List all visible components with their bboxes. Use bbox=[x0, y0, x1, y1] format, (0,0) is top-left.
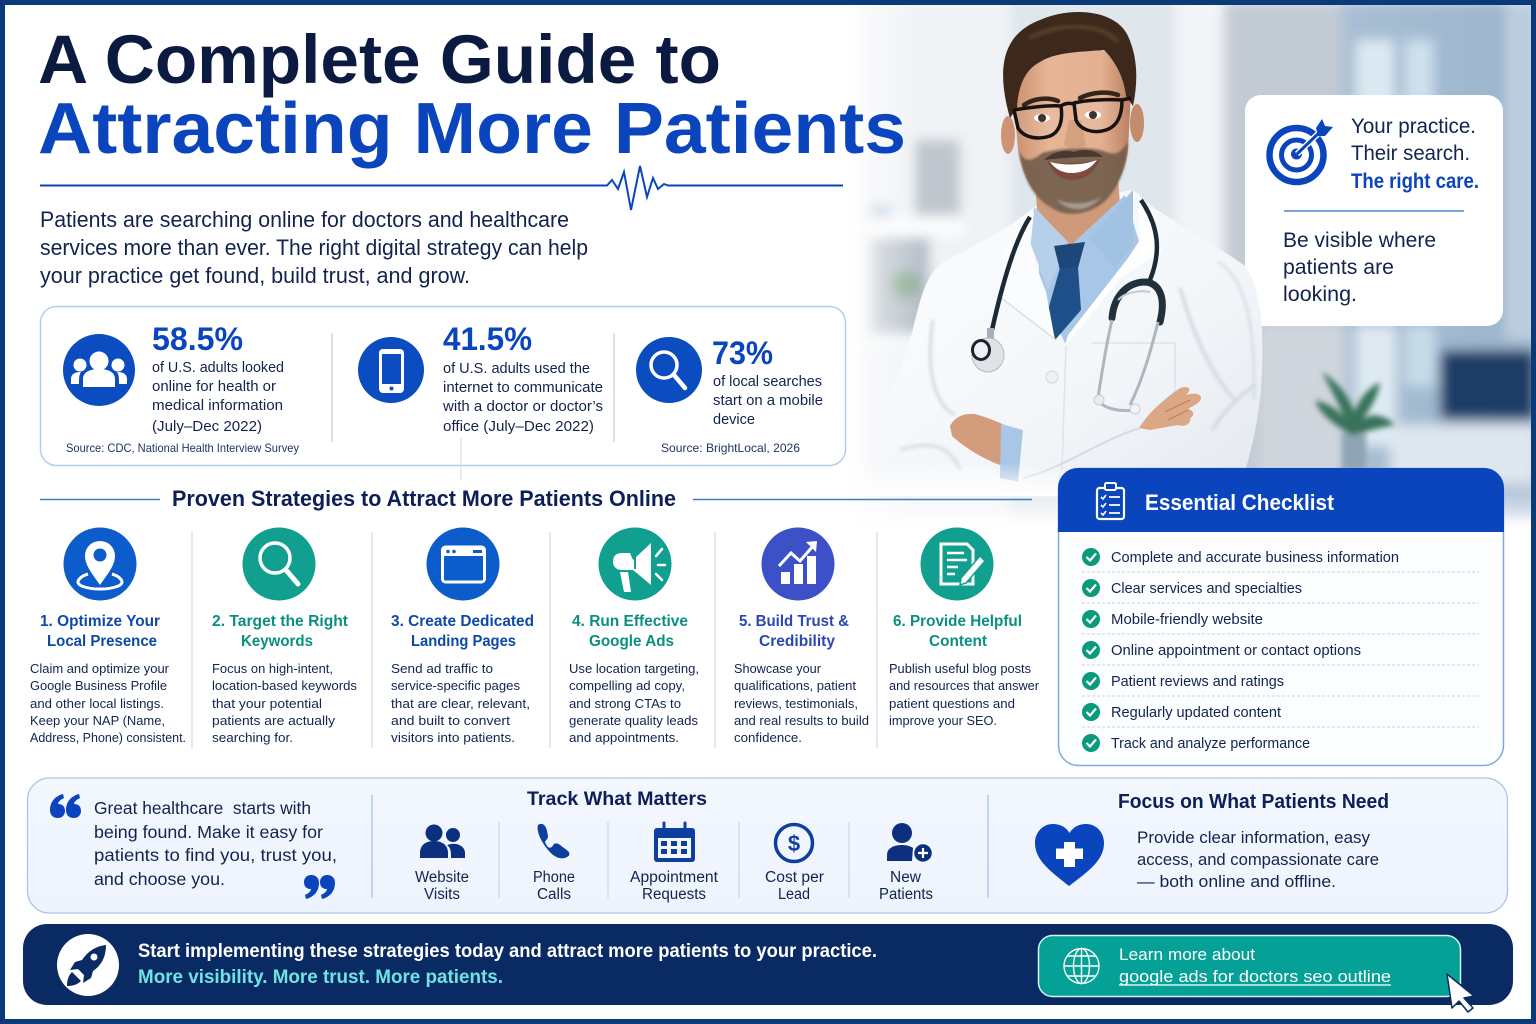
strategy 2: target keywords: that your potential bbox=[212, 696, 322, 711]
icon: opening quote bbox=[50, 794, 81, 818]
strategy 6: helpful content: improve your SEO. bbox=[889, 713, 997, 728]
strategy 4: google ads: and appointments. bbox=[569, 730, 679, 745]
icon: cost per lead: $ bbox=[788, 831, 800, 856]
button: learn more bbox=[1038, 936, 1460, 996]
track what matters: Appointment bbox=[630, 869, 719, 886]
intro text: Patients are searching online for doctors and healthcare bbox=[40, 207, 569, 232]
strategy 5: trust and credibility: qualifications, patient bbox=[734, 678, 856, 693]
icon: calendar bbox=[654, 823, 695, 862]
stat: 41.5% bbox=[442, 321, 603, 435]
call to action bar bbox=[23, 924, 1513, 1012]
strategy 3: landing pages bbox=[391, 528, 534, 745]
intro text: services more than ever. The right digital strategy can help bbox=[40, 235, 588, 260]
checklist items: Clear services and specialties bbox=[1111, 580, 1302, 597]
stethoscope bbox=[992, 200, 1162, 414]
strategy 1: optimize local presence: Google Business Profile bbox=[30, 678, 167, 693]
checklist items: Track and analyze performance bbox=[1111, 735, 1310, 752]
button: learn more: google ads for doctors seo outline bbox=[1119, 968, 1391, 986]
strategy 6: helpful content: 6. Provide Helpful bbox=[893, 613, 1022, 630]
strategy 2: target keywords: Keywords bbox=[241, 633, 313, 650]
chest piece bbox=[971, 328, 1004, 372]
focus on what patients need: — both online and offline. bbox=[1137, 872, 1336, 891]
strategy 6: helpful content: patient questions and bbox=[889, 696, 1015, 711]
stat: 58.5%: 58.5% bbox=[152, 321, 243, 357]
strategy 4: google ads: and strong CTAs to bbox=[569, 696, 681, 711]
stat: 41.5%: internet to communicate bbox=[443, 379, 603, 396]
strategy 4: google ads: Google Ads bbox=[589, 633, 674, 650]
icon: rocket bbox=[57, 934, 119, 996]
title: Attracting More Patients bbox=[38, 89, 906, 169]
eyebrows bbox=[1024, 93, 1118, 105]
quote: and choose you. bbox=[94, 869, 225, 889]
strategy 3: landing pages: Send ad traffic to bbox=[391, 661, 493, 676]
plant bbox=[1315, 372, 1395, 470]
track what matters: New bbox=[890, 869, 922, 886]
nose shadow bbox=[1064, 120, 1086, 149]
strategy 5: trust and credibility: Credibility bbox=[759, 633, 835, 650]
stat: 41.5%: office (July–Dec 2022) bbox=[443, 418, 594, 435]
checklist items: Complete and accurate business information bbox=[1111, 549, 1399, 566]
icon: map pin bbox=[64, 528, 136, 600]
icon: clipboard bbox=[1097, 483, 1124, 519]
icon: cost per lead bbox=[776, 824, 812, 862]
strategy 2: target keywords: 2. Target the Right bbox=[212, 613, 349, 630]
icon: heart with cross bbox=[1035, 824, 1104, 886]
intro text: your practice get found, build trust, and grow. bbox=[40, 263, 470, 288]
callout: target card: looking. bbox=[1283, 283, 1357, 306]
background: blurred clinic photo bbox=[810, 0, 1536, 538]
strategy 2: target keywords: location-based keywords bbox=[212, 678, 358, 693]
strategy 1: optimize local presence: and other local listings. bbox=[30, 696, 164, 711]
call to action bar: Start implementing these strategies today and attract more patients to your practice. bbox=[138, 940, 877, 962]
strategy 2: target keywords: searching for. bbox=[212, 730, 293, 745]
strategy 1: optimize local presence: Address, Phone) consistent. bbox=[30, 730, 186, 745]
checklist header: Essential Checklist bbox=[1145, 490, 1335, 515]
strategy 6: helpful content: Publish useful blog posts bbox=[889, 661, 1031, 676]
stat: 58.5%: online for health or bbox=[152, 378, 276, 395]
hands and cuffs bbox=[950, 414, 1012, 467]
strategy 5: trust and credibility bbox=[734, 528, 869, 745]
focus on what patients need: Focus on What Patients Need bbox=[1118, 791, 1389, 813]
checklist items bbox=[1111, 549, 1399, 752]
moustache bbox=[1044, 150, 1103, 160]
lapels bbox=[1000, 212, 1055, 340]
icon: new patient bbox=[887, 823, 932, 862]
stat: 73%: device bbox=[713, 411, 755, 428]
checklist items: Mobile-friendly website bbox=[1111, 611, 1263, 628]
icon: closing quote bbox=[304, 875, 335, 899]
quote: patients to find you, trust you, bbox=[94, 845, 337, 865]
heartbeat divider bbox=[40, 166, 843, 210]
icon: browser window bbox=[426, 528, 500, 600]
photo: smiling doctor in white coat bbox=[860, 12, 1262, 498]
icon: globe bbox=[1064, 948, 1099, 984]
button: learn more: Learn more about bbox=[1119, 946, 1255, 964]
tie bbox=[1054, 242, 1085, 270]
glasses bbox=[1014, 100, 1122, 138]
track what matters: Phone bbox=[533, 869, 575, 886]
icon: magnifier bbox=[636, 337, 702, 403]
check icons bbox=[1082, 548, 1100, 752]
focus on what patients need: Provide clear information, easy bbox=[1137, 828, 1370, 847]
icon: rising chart bbox=[762, 528, 834, 600]
soft fade at the bottom of the coat bbox=[860, 462, 1058, 496]
track what matters: Website bbox=[415, 869, 469, 886]
strategy 3: landing pages: 3. Create Dedicated bbox=[391, 613, 534, 630]
callout: target card: Your practice. bbox=[1351, 115, 1476, 138]
strategy 6: helpful content bbox=[889, 528, 1040, 728]
neck bbox=[1035, 180, 1122, 262]
strategy 4: google ads: generate quality leads bbox=[569, 713, 699, 728]
stat: 73%: 73% bbox=[712, 335, 773, 371]
intro text bbox=[40, 207, 588, 288]
hair bbox=[1003, 12, 1136, 118]
stat: 73% bbox=[712, 335, 823, 428]
strategy 5: trust and credibility: confidence. bbox=[734, 730, 802, 745]
strategy 3: landing pages: service-specific pages bbox=[391, 678, 520, 693]
quote: being found. Make it easy for bbox=[94, 822, 323, 842]
strategy 3: landing pages: that are clear, relevant, bbox=[391, 696, 530, 711]
icon: phone bbox=[538, 824, 569, 858]
strategy 4: google ads bbox=[569, 528, 699, 745]
icon: smartphone bbox=[358, 337, 424, 403]
checklist items: Patient reviews and ratings bbox=[1111, 673, 1284, 690]
strategy 3: landing pages: and built to convert bbox=[391, 713, 510, 728]
strategy 5: trust and credibility: reviews, testimonials, bbox=[734, 696, 858, 711]
eyes bbox=[1034, 114, 1050, 122]
stat: 73%: of local searches bbox=[713, 373, 822, 390]
strategy 3: landing pages: Landing Pages bbox=[411, 633, 516, 650]
strategy 4: google ads: Use location targeting, bbox=[569, 661, 699, 676]
track what matters: Cost per bbox=[765, 869, 824, 886]
callout: target card: patients are bbox=[1283, 256, 1394, 279]
beard stubble bbox=[1019, 142, 1128, 214]
strategy 2: target keywords bbox=[212, 528, 358, 745]
strategy 1: optimize local presence: 1. Optimize Your bbox=[40, 613, 160, 630]
checklist items: Regularly updated content bbox=[1111, 704, 1282, 721]
strategy 1: optimize local presence: Keep your NAP (Name, bbox=[30, 713, 165, 728]
strategy 2: target keywords: patients are actually bbox=[212, 713, 336, 728]
callout: target card: The right care. bbox=[1351, 170, 1479, 193]
strategy 5: trust and credibility: 5. Build Trust & bbox=[739, 613, 849, 630]
strategy 4: google ads: 4. Run Effective bbox=[572, 613, 688, 630]
stat: 41.5%: with a doctor or doctor’s bbox=[442, 398, 603, 415]
strategy 5: trust and credibility: Showcase your bbox=[734, 661, 822, 676]
pocket bbox=[1092, 343, 1175, 400]
strategy 1: optimize local presence: Local Presence bbox=[47, 633, 157, 650]
call to action bar: More visibility. More trust. More patients. bbox=[138, 966, 503, 988]
strategy 6: helpful content: Content bbox=[929, 633, 988, 650]
stat: 58.5%: of U.S. adults looked bbox=[152, 359, 284, 376]
callout: target card: Their search. bbox=[1351, 142, 1470, 165]
section heading: proven strategies: Proven Strategies to Attract More Patients Online bbox=[172, 486, 676, 511]
icon: people bbox=[63, 334, 135, 406]
track what matters bbox=[415, 789, 933, 903]
track what matters: Lead bbox=[778, 886, 810, 903]
track what matters: Calls bbox=[537, 886, 571, 903]
callout: target card: Be visible where bbox=[1283, 229, 1436, 252]
panel: statistics bbox=[40, 306, 846, 480]
panel: bottom summary band bbox=[28, 778, 1508, 913]
track what matters: Visits bbox=[424, 886, 460, 903]
panel: essential checklist bbox=[1058, 468, 1504, 766]
strategy 1: optimize local presence: Claim and optimize your bbox=[30, 661, 170, 676]
icon: mouse cursor bbox=[1447, 974, 1474, 1012]
callout: target card bbox=[1245, 95, 1503, 326]
strategy 4: google ads: compelling ad copy, bbox=[569, 678, 685, 693]
track what matters: Patients bbox=[879, 886, 933, 903]
quote: Great healthcare starts with bbox=[94, 798, 311, 818]
icon: document and pencil bbox=[920, 528, 994, 600]
checklist items: Online appointment or contact options bbox=[1111, 642, 1361, 659]
source: BrightLocal: Source: BrightLocal, 2026 bbox=[661, 441, 800, 455]
title: A Complete Guide to bbox=[38, 21, 721, 98]
smile bbox=[1047, 159, 1100, 180]
icon: target with arrow bbox=[1270, 119, 1333, 182]
focus on what patients need: access, and compassionate care bbox=[1137, 850, 1379, 869]
stat: 58.5%: (July–Dec 2022) bbox=[152, 418, 262, 435]
focus on what patients need bbox=[1035, 791, 1389, 891]
stat: 58.5% bbox=[152, 321, 284, 435]
shirt and collar bbox=[1036, 195, 1140, 345]
track what matters: Track What Matters bbox=[527, 789, 707, 810]
stat: 73%: start on a mobile bbox=[713, 392, 823, 409]
stat: 41.5%: 41.5% bbox=[443, 321, 532, 357]
track what matters: Requests bbox=[642, 886, 706, 903]
checklist header bbox=[1058, 468, 1504, 532]
head bbox=[1001, 12, 1144, 214]
strategy 2: target keywords: Focus on high-intent, bbox=[212, 661, 333, 676]
stat: 58.5%: medical information bbox=[152, 397, 283, 414]
icon: magnifier bbox=[242, 528, 316, 600]
strategy 6: helpful content: and resources that answer bbox=[889, 678, 1040, 693]
strategy 3: landing pages: visitors into patients. bbox=[391, 730, 515, 745]
quote bbox=[50, 794, 337, 899]
strategy 1: optimize local presence bbox=[30, 528, 186, 745]
strategy 5: trust and credibility: and real results to build bbox=[734, 713, 869, 728]
icon: website visits bbox=[420, 824, 465, 858]
title bbox=[38, 21, 906, 169]
stat: 41.5%: of U.S. adults used the bbox=[443, 360, 590, 377]
source: CDC: Source: CDC, National Health Interview Survey bbox=[66, 441, 299, 455]
coat bbox=[872, 190, 1262, 498]
icon: megaphone bbox=[598, 528, 672, 600]
